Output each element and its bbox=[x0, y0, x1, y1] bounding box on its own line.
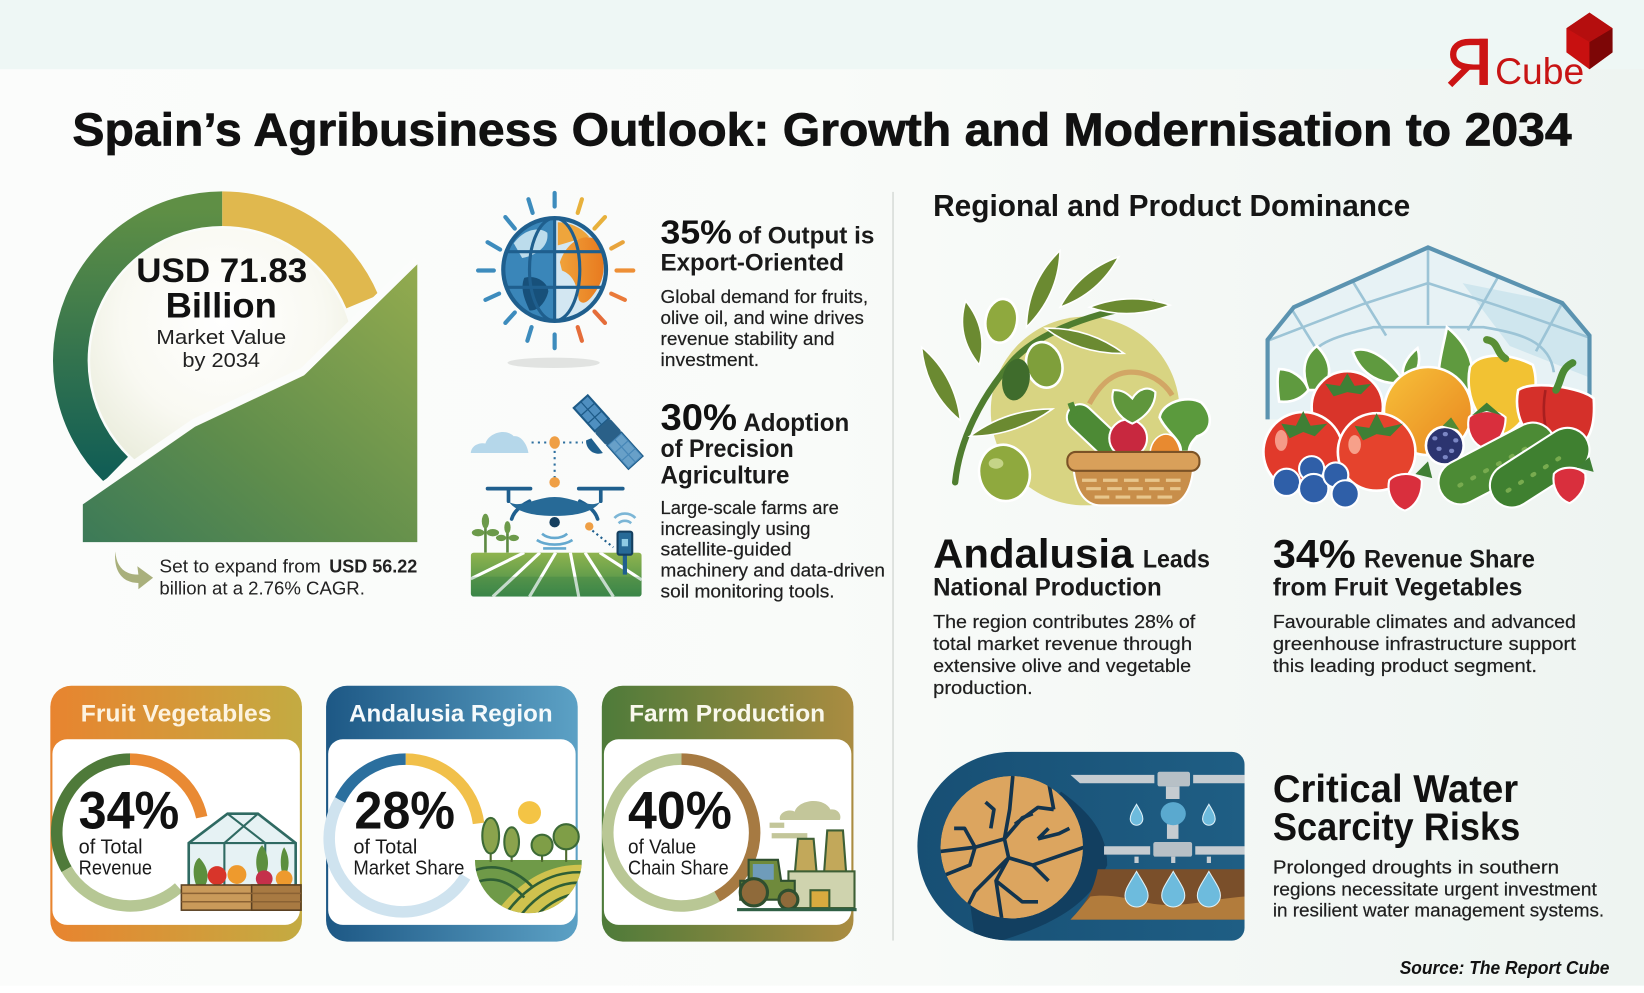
market value text: by 2034 bbox=[182, 350, 260, 372]
card: andalusia region: Andalusia Region bbox=[349, 700, 553, 727]
stat text: of Value bbox=[628, 836, 696, 859]
market value text bbox=[136, 252, 307, 372]
stat text bbox=[628, 782, 732, 880]
market value text: USD 71.83 bbox=[136, 252, 307, 290]
andalusia text: Andalusia bbox=[933, 530, 1134, 576]
fruit vegetables text: this leading product segment. bbox=[1273, 655, 1537, 676]
fruit vegetables text: 34% bbox=[1273, 532, 1356, 576]
export stat: revenue stability and bbox=[661, 328, 835, 349]
stat text: Chain Share bbox=[628, 857, 729, 880]
card: farm production: Farm Production bbox=[629, 700, 825, 727]
icon: drone, satellite and field bbox=[471, 395, 643, 597]
precision agriculture stat: 30% bbox=[661, 397, 737, 438]
logo: Cube bbox=[1495, 51, 1584, 92]
water scarcity text bbox=[1273, 768, 1604, 920]
icon: landscape bbox=[475, 801, 582, 914]
andalusia text: extensive olive and vegetable bbox=[933, 655, 1191, 676]
pipes bbox=[1070, 775, 1245, 783]
card: andalusia region bbox=[326, 686, 587, 942]
growth note: Set to expand from bbox=[159, 556, 321, 577]
blackberry bbox=[1426, 417, 1464, 465]
section heading: Regional and Product Dominance bbox=[933, 189, 1410, 223]
icon: globe with sun rays bbox=[478, 193, 633, 368]
blueberries bbox=[1273, 456, 1359, 508]
precision agriculture stat: satellite-guided bbox=[661, 539, 792, 560]
icon: mini greenhouse bbox=[181, 814, 301, 910]
peppers bbox=[1469, 356, 1536, 434]
cracked soil bbox=[940, 776, 1084, 923]
stat text: 40% bbox=[628, 782, 732, 840]
andalusia text: Leads bbox=[1143, 545, 1210, 573]
andalusia text: National Production bbox=[933, 574, 1162, 602]
logo bbox=[1450, 13, 1613, 92]
market value text: Market Value bbox=[156, 327, 286, 349]
andalusia text: production. bbox=[933, 677, 1033, 698]
stat text: Revenue bbox=[79, 857, 152, 880]
precision agriculture stat: soil monitoring tools. bbox=[661, 581, 835, 602]
orange bbox=[1384, 367, 1472, 455]
source note: Source: The Report Cube bbox=[1400, 957, 1609, 978]
stat text bbox=[79, 782, 179, 880]
growth note: billion at a 2.76% CAGR. bbox=[159, 578, 365, 599]
market value gauge bbox=[70, 209, 417, 542]
stat text: of Total bbox=[79, 836, 143, 859]
precision agriculture stat: increasingly using bbox=[661, 518, 810, 539]
export stat: Export-Oriented bbox=[661, 250, 844, 277]
fruit vegetables text bbox=[1273, 532, 1577, 676]
donut: 28% bbox=[329, 759, 479, 912]
water scarcity text: in resilient water management systems. bbox=[1273, 899, 1604, 920]
card: fruit vegetables: Fruit Vegetables bbox=[81, 700, 272, 727]
stat text: 28% bbox=[354, 782, 455, 840]
card: farm production bbox=[602, 686, 857, 942]
andalusia text: total market revenue through bbox=[933, 633, 1192, 654]
fruit vegetables text: Favourable climates and advanced bbox=[1273, 611, 1576, 632]
export stat: of Output is bbox=[738, 222, 874, 249]
andalusia text bbox=[933, 530, 1210, 698]
title: Spain’s Agribusiness Outlook: Growth and Modernisation to 2034 bbox=[72, 104, 1572, 156]
divider bbox=[892, 192, 894, 941]
water drops bbox=[1125, 804, 1220, 907]
stat text: Market Share bbox=[353, 857, 464, 880]
fruit vegetables text: from Fruit Vegetables bbox=[1273, 574, 1522, 602]
stat text: of Total bbox=[353, 836, 417, 859]
donut: 40% bbox=[608, 759, 755, 906]
icon: growth arrow bbox=[115, 552, 153, 589]
fruit vegetables text: greenhouse infrastructure support bbox=[1273, 633, 1577, 654]
export stat: investment. bbox=[661, 349, 759, 370]
precision agriculture stat: Large-scale farms are bbox=[661, 497, 839, 518]
export stat: Global demand for fruits, bbox=[661, 286, 868, 307]
fruit vegetables text: Revenue Share bbox=[1364, 545, 1535, 573]
card: fruit vegetables bbox=[50, 686, 302, 942]
water scarcity text: Prolonged droughts in southern bbox=[1273, 856, 1559, 877]
precision agriculture stat: of Precision bbox=[661, 435, 794, 463]
growth area bbox=[83, 264, 417, 542]
stat text: 34% bbox=[79, 782, 179, 840]
icon: tractor and factory bbox=[737, 801, 857, 911]
market value text: Billion bbox=[166, 286, 277, 326]
strawberry on cucumber bbox=[1553, 468, 1586, 503]
water scarcity text: regions necessitate urgent investment bbox=[1273, 878, 1598, 899]
precision agriculture stat: machinery and data-driven bbox=[661, 560, 885, 581]
stat text bbox=[353, 782, 464, 880]
growth note: USD 56.22 bbox=[329, 556, 417, 577]
illustration: greenhouse with fruit vegetables bbox=[1263, 247, 1594, 511]
growth note bbox=[159, 556, 417, 599]
andalusia text: The region contributes 28% of bbox=[933, 611, 1196, 632]
water scarcity text: Critical Water bbox=[1273, 768, 1518, 811]
illustration: olive branch and basket bbox=[922, 251, 1210, 507]
precision agriculture stat: Adoption bbox=[743, 409, 849, 437]
illustration: dry soil and irrigation bbox=[917, 752, 1245, 941]
leaves bbox=[1278, 327, 1472, 402]
precision agriculture stat bbox=[661, 397, 885, 602]
cucumbers bbox=[1461, 445, 1533, 482]
export stat: olive oil, and wine drives bbox=[661, 307, 864, 328]
export stat bbox=[661, 214, 874, 370]
export stat: 35% bbox=[661, 214, 732, 251]
strawberries bbox=[1389, 403, 1506, 511]
donut: 34% bbox=[57, 759, 202, 906]
precision agriculture stat: Agriculture bbox=[661, 461, 790, 489]
soil layers bbox=[1070, 869, 1245, 920]
water scarcity text: Scarcity Risks bbox=[1273, 806, 1520, 849]
tomatoes bbox=[1312, 371, 1383, 442]
